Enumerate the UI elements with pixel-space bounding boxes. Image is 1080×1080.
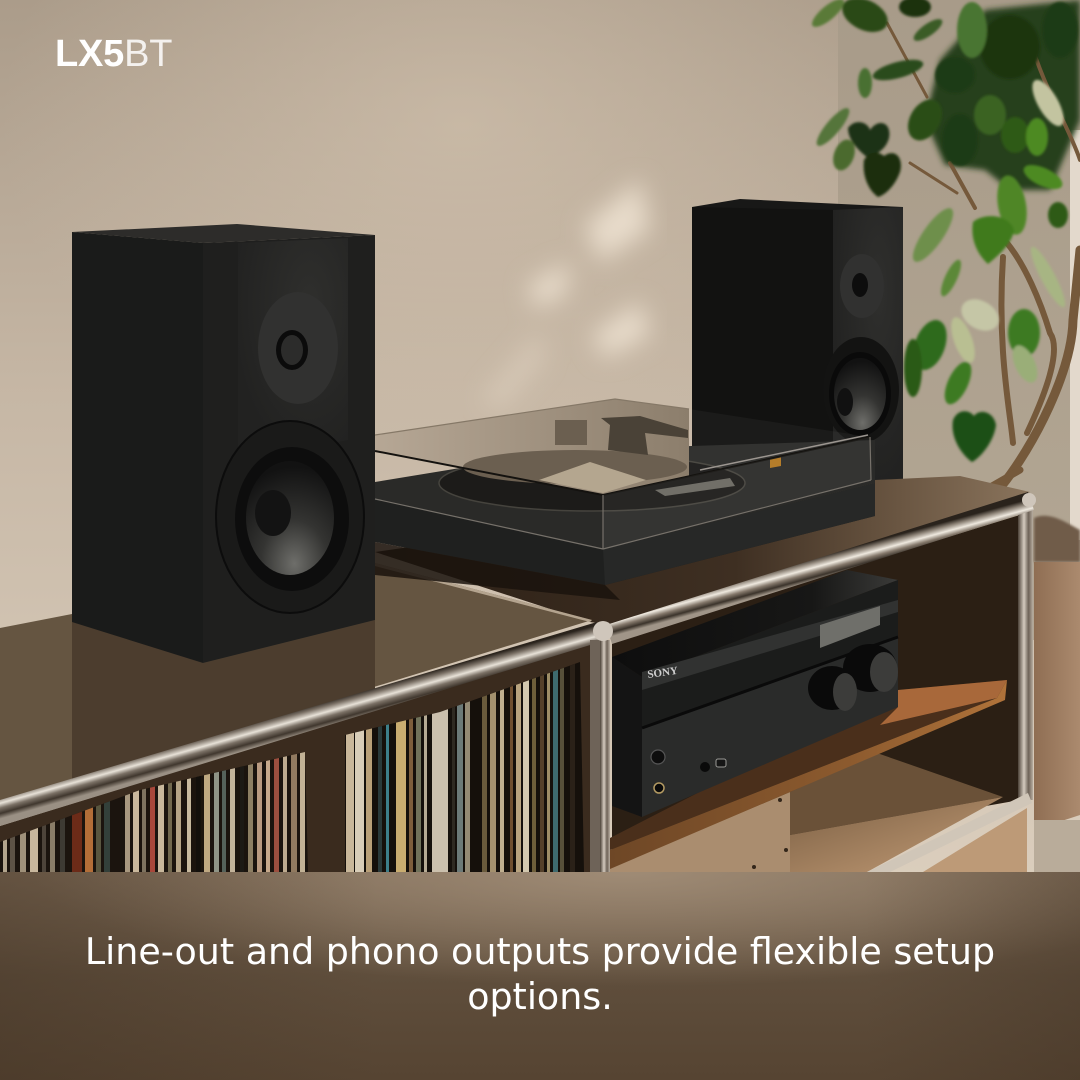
- chrome posts and joints: [590, 493, 1036, 872]
- amplifier ports: [651, 750, 726, 793]
- turntable base: [375, 440, 875, 600]
- logo: LX5BT: [55, 33, 172, 75]
- record collection left: [0, 752, 308, 872]
- plant pot: [1034, 516, 1080, 875]
- amplifier volume knobs: [808, 644, 898, 711]
- dappled sunlight on wall: [480, 180, 650, 410]
- lower floor shaded: [790, 753, 1003, 835]
- right cabinet frame: [867, 510, 1033, 872]
- under front rail backing: [0, 640, 600, 872]
- right speaker tweeter: [840, 254, 884, 318]
- back cabinet top surface: [375, 476, 1030, 625]
- caption text: Line-out and phono outputs provide flexible setup options.: [85, 930, 995, 1018]
- front cabinet top surface: [0, 563, 592, 802]
- right post: [1018, 510, 1033, 800]
- reflected label: [539, 462, 646, 493]
- plant leaves: [808, 0, 1078, 462]
- reflected tonearm: [601, 416, 688, 455]
- wooden shelf: [610, 680, 1007, 869]
- amplifier compartment: [610, 515, 1020, 872]
- lower chrome rail: [867, 793, 1032, 872]
- amplifier brand: SONY: [647, 665, 679, 681]
- left speaker: [72, 224, 375, 663]
- right speaker woofer: [823, 337, 899, 443]
- turntable platter: [439, 455, 745, 511]
- bottom caption band: [0, 872, 1080, 1080]
- reflected platter: [463, 450, 687, 484]
- back chrome rail: [606, 492, 1034, 644]
- record collection right: [345, 650, 585, 872]
- reflection of left speaker: [72, 620, 375, 790]
- lower front panel: [923, 808, 1027, 872]
- MDF panel: [610, 792, 790, 872]
- plant: [808, 0, 1080, 490]
- left speaker tweeter: [258, 292, 338, 404]
- right speaker: [692, 199, 903, 486]
- lower floor lit: [790, 797, 1003, 872]
- amplifier: [612, 570, 898, 817]
- left speaker woofer: [216, 421, 364, 613]
- turntable: [375, 399, 875, 600]
- reflected cartridge: [555, 420, 587, 445]
- compartment back wall: [612, 515, 1020, 872]
- front chrome rail: [0, 622, 600, 826]
- turntable dust cover top: [375, 399, 871, 549]
- plant stems: [887, 23, 1080, 490]
- cover edges: [375, 437, 870, 495]
- orange indicator: [770, 456, 781, 468]
- plant foliage mass: [925, 0, 1080, 190]
